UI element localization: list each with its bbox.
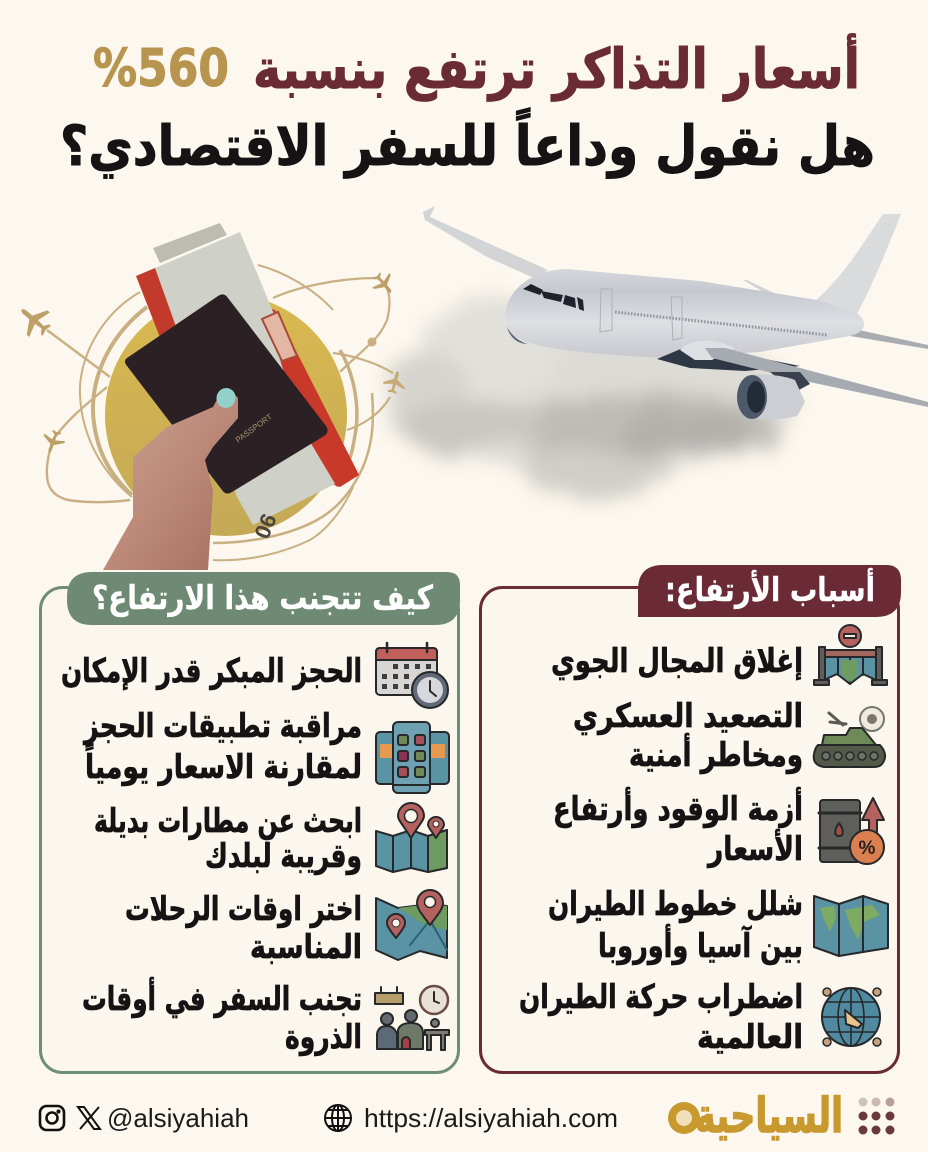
title <box>60 33 875 179</box>
tip 3 text: ابحث عن مطارات بديلة <box>94 801 362 841</box>
cause 2 text: التصعيد العسكري <box>573 696 803 736</box>
thumbnail <box>214 385 238 411</box>
cause 4 text: شلل خطوط الطيران <box>548 884 803 924</box>
logo <box>668 1088 843 1144</box>
fuselage <box>505 269 864 358</box>
icon: globe network <box>822 988 881 1046</box>
far wing <box>423 206 548 278</box>
tip 5 text <box>82 977 362 1057</box>
icon: map with two pins <box>376 803 447 872</box>
icon: tank <box>814 707 885 767</box>
cause 2 text <box>573 696 803 775</box>
tip 2 text: مراقبة تطبيقات الحجز <box>82 706 362 746</box>
icon: world map <box>814 896 888 956</box>
panel: how to avoid <box>40 572 460 1072</box>
ticket label <box>262 312 297 361</box>
icon: X <box>78 1107 100 1129</box>
passport <box>125 294 328 494</box>
cause 4 text: بين آسيا وأوروبا <box>598 924 803 966</box>
cause 2 text: ومخاطر أمنية <box>629 733 803 775</box>
tip 5 text: تجنب السفر في أوقات <box>82 977 362 1019</box>
tip 3 text <box>94 801 362 876</box>
causes heading: أسباب الأرتفاع: <box>665 568 875 609</box>
icon: phones with apps <box>376 722 449 793</box>
cause 1 text: إغلاق المجال الجوي <box>551 641 803 681</box>
cause 5 text: اضطراب حركة الطيران <box>519 977 803 1017</box>
tip 1 text: الحجز المبكر قدر الإمكان <box>61 651 362 691</box>
cause 5 text: العالمية <box>697 1017 803 1056</box>
near wing <box>705 348 928 407</box>
red ticket edge <box>268 320 359 487</box>
back ticket <box>153 223 227 263</box>
website url: https://alsiyahiah.com <box>364 1103 618 1133</box>
icon: map with route <box>376 890 447 960</box>
passport label: PASSPORT <box>234 412 274 445</box>
cause 5 text <box>519 977 803 1056</box>
small plane right <box>381 369 408 396</box>
tip 2 text: لمقارنة الاسعار يومياً <box>85 743 362 787</box>
red back ticket <box>136 268 359 487</box>
cloud <box>383 298 795 495</box>
avoid heading: كيف تتجنب هذا الارتفاع؟ <box>92 578 434 617</box>
tip 4 text: المناسبة <box>250 927 362 966</box>
icon: oil barrel and percent: % <box>859 838 876 859</box>
far stabilizer <box>743 280 778 296</box>
nose shadow <box>507 327 528 344</box>
icon: crowded airport and clock <box>375 986 449 1050</box>
logo dots <box>858 1098 894 1134</box>
social handle: @alsiyahiah <box>107 1103 249 1133</box>
belly fairing <box>657 348 800 371</box>
icon: instagram <box>40 1106 64 1130</box>
icon: oil barrel and percent <box>819 798 884 864</box>
tip 5 text: الذروة <box>285 1017 362 1057</box>
icon: calendar and clock <box>376 643 448 708</box>
illustration: passport, tickets and hand <box>11 223 408 570</box>
tip 2 text <box>82 706 362 787</box>
engine pylon <box>770 372 810 392</box>
icon: website globe <box>325 1105 351 1131</box>
small plane lower left <box>39 427 67 456</box>
hand <box>103 391 238 570</box>
highlighted percentage: %560 <box>93 39 229 99</box>
small plane top right <box>368 268 399 299</box>
cabin doors <box>600 289 682 340</box>
rear stabilizer <box>850 328 928 349</box>
cockpit windows <box>523 284 584 311</box>
tip 3 text: وقريبة لبلدك <box>205 836 362 876</box>
ticket number: 90 <box>249 510 282 542</box>
orbit node <box>368 338 376 346</box>
small plane left <box>11 297 57 343</box>
engine intake <box>737 375 767 419</box>
tip 4 text: اختر اوقات الرحلات <box>125 889 362 929</box>
illustration: airplane <box>423 206 928 419</box>
panel: causes <box>480 565 901 1072</box>
causes heading tab <box>638 565 901 617</box>
cause 3 text <box>553 787 803 868</box>
white ticket <box>155 232 337 525</box>
cause 3 text: الأسعار <box>706 828 803 868</box>
icon: closed airspace barrier <box>814 625 887 685</box>
avoid heading tab <box>67 572 460 625</box>
cabin windows <box>615 312 827 335</box>
logo wordmark: السياحية <box>695 1088 843 1144</box>
gold sun circle <box>105 294 347 536</box>
cause 3 text: أزمة الوقود وأرتفاع <box>553 787 803 829</box>
footer <box>40 1088 894 1144</box>
wing root <box>680 341 735 360</box>
cause 4 text <box>548 884 803 966</box>
logo emblem <box>668 1102 700 1134</box>
tail fin <box>815 214 901 314</box>
causes frame <box>480 588 898 1072</box>
tip 4 text <box>125 889 362 966</box>
avoid frame <box>40 588 458 1072</box>
orbit lines <box>47 265 393 560</box>
engine <box>750 374 805 419</box>
